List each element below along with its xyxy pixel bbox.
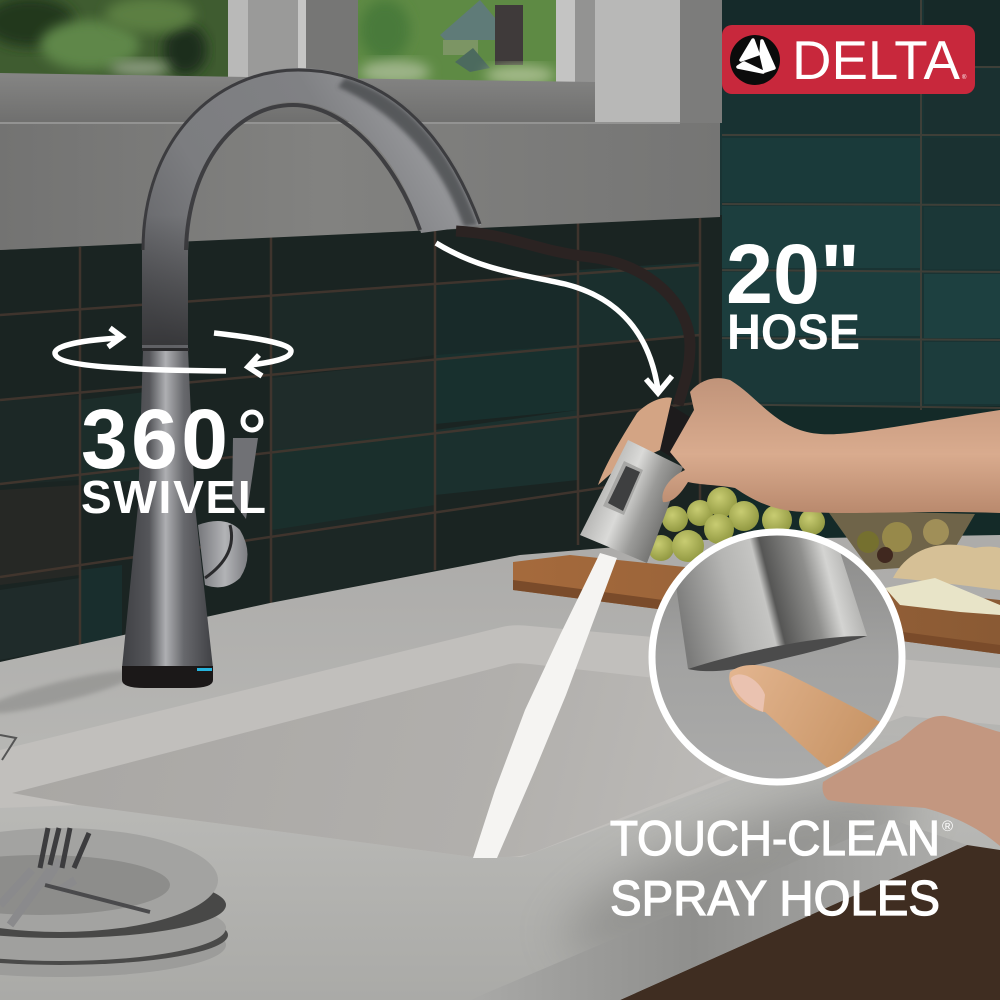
hose word: HOSE xyxy=(727,304,860,360)
handle lever xyxy=(232,438,258,519)
hand on counter xyxy=(823,716,1000,846)
registered mark: ® xyxy=(942,818,953,835)
plates and forks xyxy=(0,828,228,977)
hose collar xyxy=(648,403,690,458)
logo wordmark: DELTA xyxy=(792,29,960,91)
backsplash tiles, left side xyxy=(0,215,722,670)
water stream xyxy=(473,553,617,858)
fingers behind spray head xyxy=(598,398,672,485)
neck shade xyxy=(142,215,188,345)
grapes xyxy=(648,487,825,562)
window sill and fascia xyxy=(0,73,720,250)
logo background xyxy=(722,25,975,94)
inset spray head xyxy=(668,530,867,669)
cabinet, lower right xyxy=(620,845,1000,1000)
right pane trees and house xyxy=(358,0,556,85)
label: 360 swivel xyxy=(81,392,266,523)
collar line xyxy=(142,348,189,351)
label: touch-clean spray holes xyxy=(610,812,953,926)
base ring xyxy=(122,666,213,688)
20 inch value: 20" xyxy=(726,227,860,321)
pull-down spray head xyxy=(580,398,690,563)
forks xyxy=(0,828,150,925)
inset ring xyxy=(652,532,902,782)
sink rim xyxy=(0,625,1000,857)
gooseneck spout xyxy=(142,68,481,350)
button xyxy=(608,466,640,511)
spout inner dark edge xyxy=(186,105,420,250)
label: 20 inch hose xyxy=(726,227,860,360)
bread and cheese xyxy=(885,545,1000,615)
backsplash tiles, right side xyxy=(700,0,1000,560)
circular inset xyxy=(650,530,904,784)
touch-clean line: TOUCH-CLEAN xyxy=(610,812,940,866)
swivel word: SWIVEL xyxy=(81,471,266,523)
counter shade, lower right xyxy=(548,754,932,986)
faucet base shadow xyxy=(0,663,140,721)
button surround xyxy=(603,461,643,515)
360 value: 360 xyxy=(81,392,228,486)
hose xyxy=(456,231,690,405)
spray holes line: SPRAY HOLES xyxy=(610,872,940,926)
inset fingertip xyxy=(729,665,880,770)
window view: trees and frame xyxy=(0,0,722,123)
arrow: hose length xyxy=(436,243,672,393)
countertop xyxy=(0,535,1000,1000)
plate stack xyxy=(0,828,228,977)
degree sign xyxy=(243,412,261,430)
counter front lip xyxy=(470,820,967,1000)
fingernail xyxy=(731,674,765,712)
cone body xyxy=(122,350,213,668)
cutting board xyxy=(513,555,1000,654)
bowl of olives xyxy=(827,510,975,570)
touch indicator light xyxy=(197,668,212,671)
spout end dark band xyxy=(338,78,478,227)
inset background xyxy=(650,530,904,784)
handle hub xyxy=(198,521,248,587)
dish rack corner xyxy=(0,735,16,760)
spout outer dark edge xyxy=(143,70,480,250)
sink basin xyxy=(12,663,905,857)
spray face xyxy=(688,636,867,671)
hand holding spray head xyxy=(662,378,1000,513)
left pane trees xyxy=(0,0,228,78)
steel body xyxy=(580,440,683,563)
registered mark: ® xyxy=(962,74,967,81)
logo emblem xyxy=(730,35,780,85)
logo: Delta xyxy=(722,25,975,94)
faucet xyxy=(122,68,481,688)
swivel arrows xyxy=(55,328,291,376)
